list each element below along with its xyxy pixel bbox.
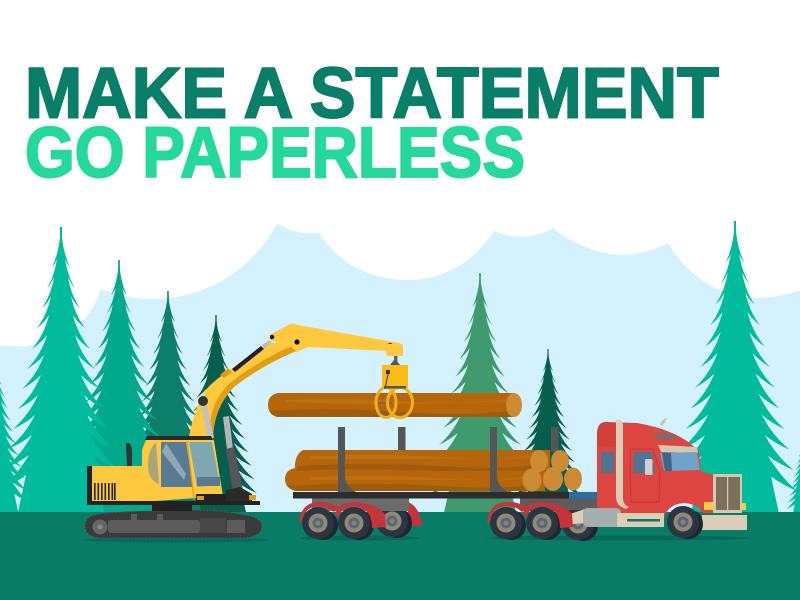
boom xyxy=(189,342,308,437)
cab step xyxy=(617,513,664,527)
suspended log xyxy=(268,393,522,417)
blue coupling xyxy=(569,492,599,498)
forest trees xyxy=(0,221,800,520)
rear stakes xyxy=(398,427,558,452)
roof vent xyxy=(653,433,678,440)
visor xyxy=(658,445,698,453)
tree: teal xyxy=(66,260,172,515)
tree: mid green xyxy=(121,291,215,517)
rear cab window xyxy=(601,452,614,473)
ground xyxy=(0,512,800,600)
exhaust stack xyxy=(616,418,667,509)
logging truck xyxy=(285,418,747,541)
rear hydraulic cylinder xyxy=(223,416,243,492)
log ends xyxy=(522,450,582,492)
excavator deck xyxy=(87,487,260,511)
tree: far left edge xyxy=(0,350,29,518)
mirror xyxy=(645,459,652,475)
excavator tracks xyxy=(85,510,262,538)
arm pivots xyxy=(270,335,392,347)
excavator rear body xyxy=(87,466,143,504)
excavator xyxy=(85,324,403,538)
fuel tank xyxy=(567,508,621,527)
wheels xyxy=(302,506,703,540)
ground shadows xyxy=(83,536,750,542)
tree: far right edge xyxy=(787,425,800,518)
arm hydraulic cylinder xyxy=(220,340,272,378)
rear wheels behind xyxy=(376,505,412,538)
tree: left large xyxy=(1,227,121,517)
bumper xyxy=(702,515,747,530)
arm xyxy=(269,324,403,355)
title xyxy=(25,54,719,193)
cab body xyxy=(597,422,713,527)
tree: right large xyxy=(673,221,797,520)
front stakes xyxy=(338,427,508,492)
tree: dark behind excavator xyxy=(175,315,257,512)
door window xyxy=(633,452,655,473)
cab shading xyxy=(597,422,616,447)
front hydraulic ram xyxy=(198,396,214,438)
tree: dark centre xyxy=(514,349,582,511)
rear trailer flap xyxy=(408,502,422,526)
tree: olive centre xyxy=(429,273,531,520)
excavator cab xyxy=(142,436,223,502)
grille xyxy=(713,474,742,513)
heading: go paperless: GO PAPERLESS xyxy=(25,114,525,193)
windshield xyxy=(660,452,700,471)
sky with cloud outline xyxy=(0,224,800,520)
headlights xyxy=(704,502,746,510)
grapple xyxy=(376,344,412,418)
door outline xyxy=(630,449,660,502)
trailer under frame xyxy=(312,498,409,511)
heading: make a statement: MAKE A STATEMENT xyxy=(25,54,719,134)
stacked logs xyxy=(285,450,582,492)
mudguards xyxy=(299,502,573,528)
exhaust pipe xyxy=(126,443,132,466)
trailer bed xyxy=(293,492,570,498)
